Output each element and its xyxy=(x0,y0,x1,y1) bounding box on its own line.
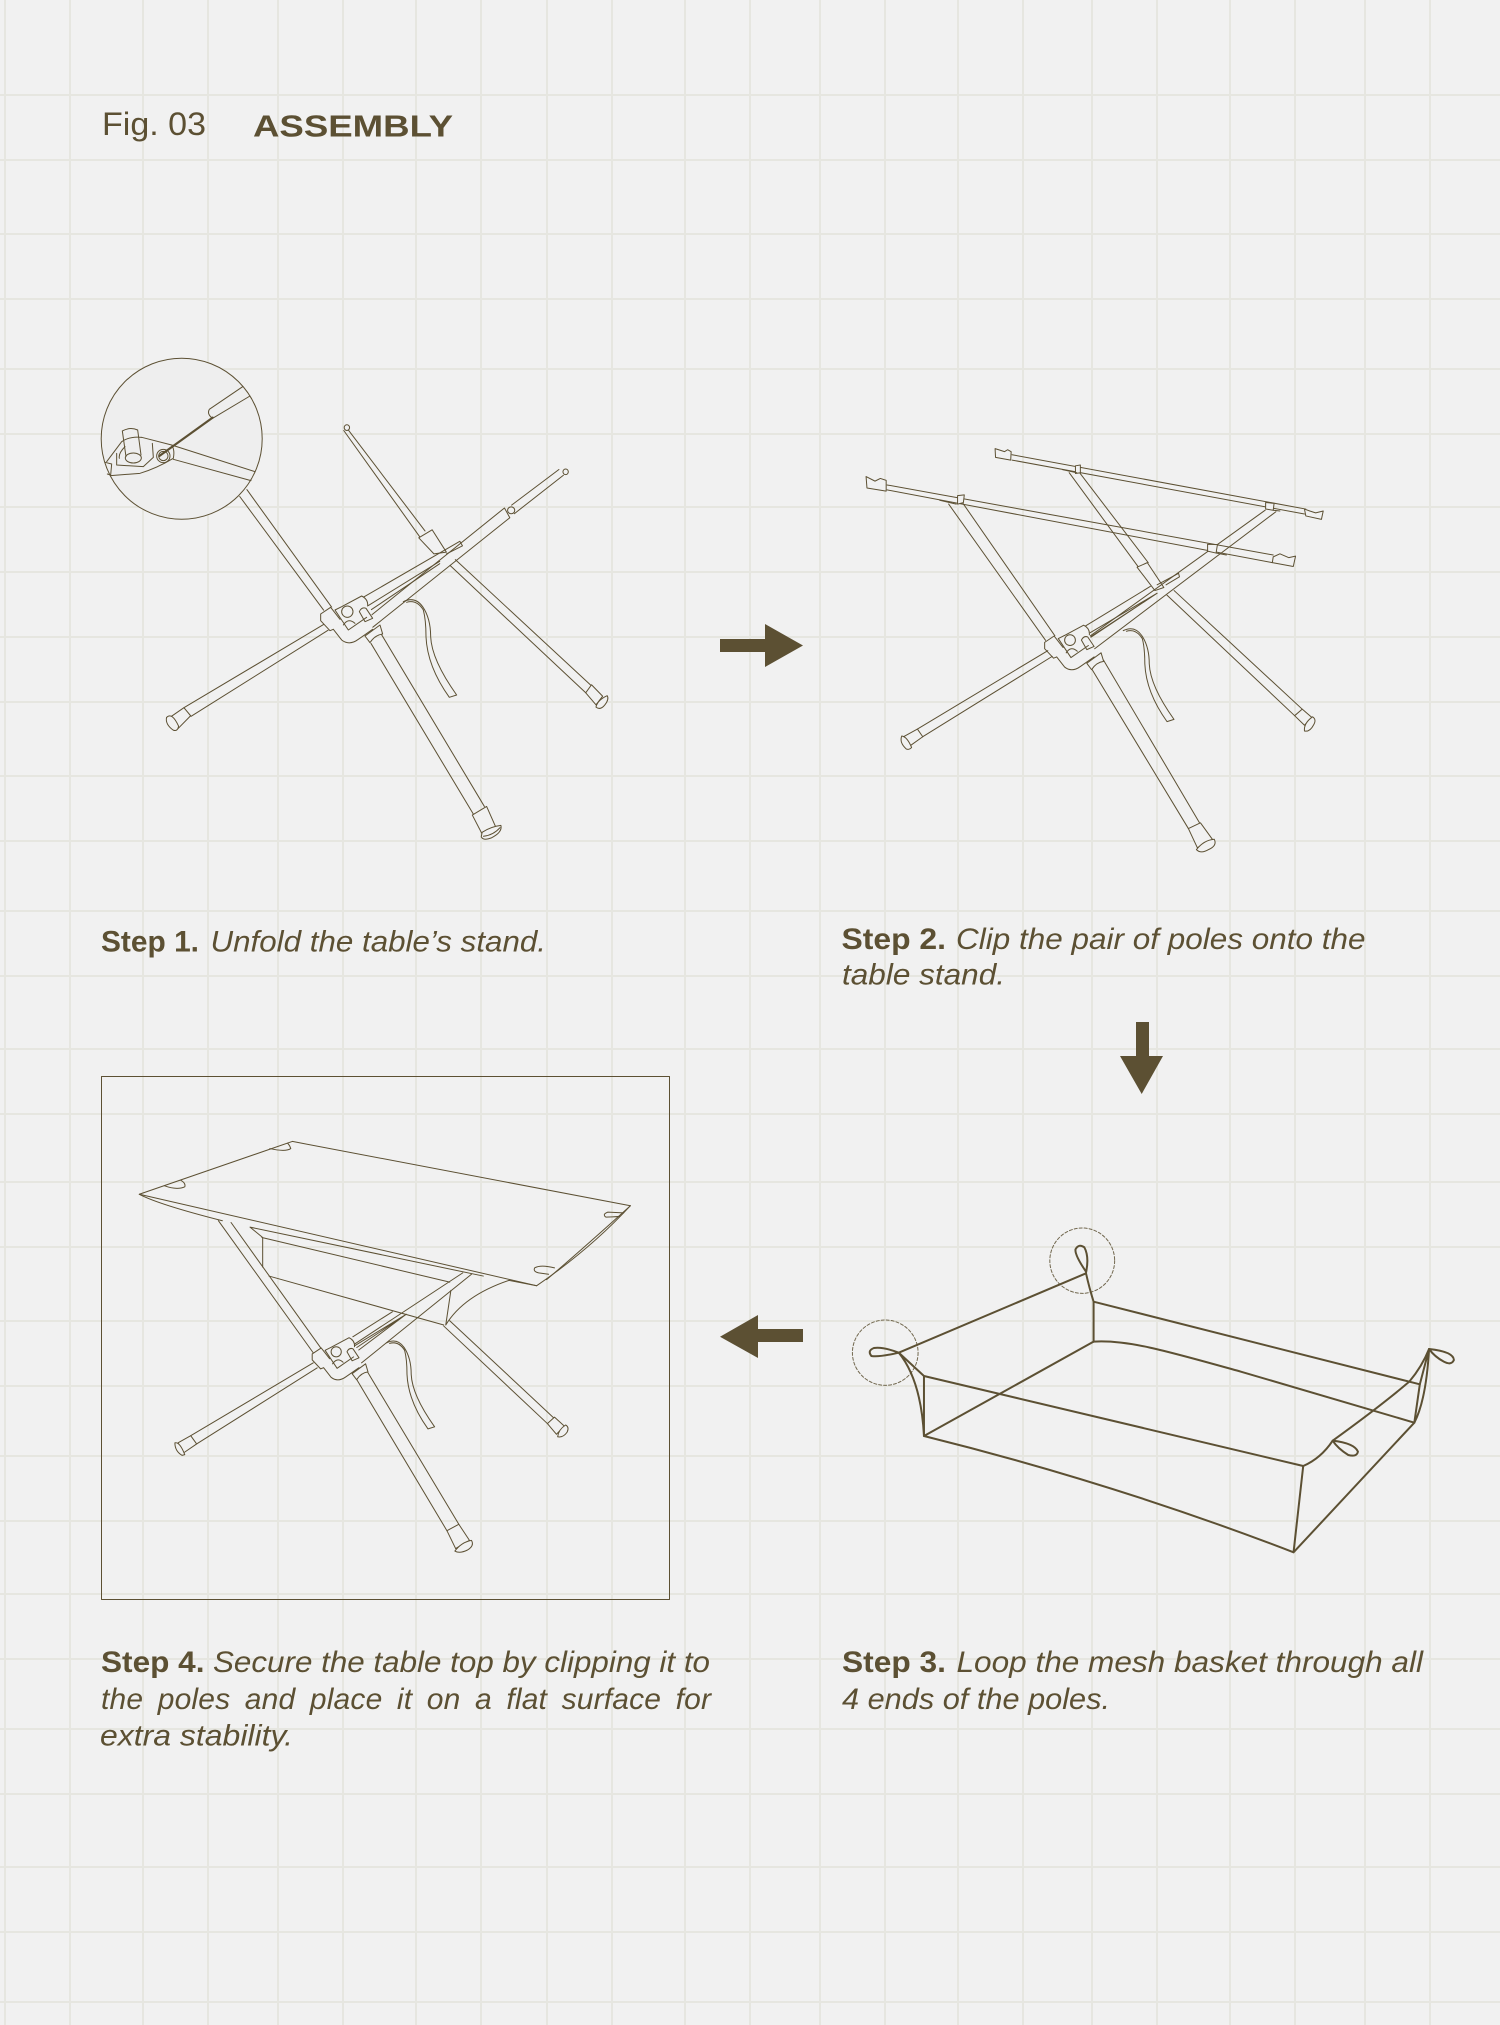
caption: step 1: Unfold the table’s stand. xyxy=(210,926,546,959)
figure number: Fig. 03 xyxy=(102,106,206,142)
heading: ASSEMBLY xyxy=(253,108,453,144)
title: Fig. 03 Assembly xyxy=(102,106,453,144)
hub bracket and strap xyxy=(321,596,457,697)
caption: step 4 xyxy=(100,1646,712,1753)
caption: step 4: Secure the table top by clipping it to xyxy=(213,1646,710,1679)
arrow: step 3 to step 4 xyxy=(720,1315,803,1358)
caption: step 2: Step 2. xyxy=(842,923,946,956)
caption: step 1: Step 1. xyxy=(101,926,199,959)
arrow: step 1 to step 2 xyxy=(720,624,803,667)
caption: step 3: Step 3. xyxy=(842,1646,946,1679)
inset joint linework xyxy=(105,387,255,481)
panel: step 1 illustration, unfolded stand xyxy=(166,425,608,839)
panel: step 3 illustration, mesh basket xyxy=(852,1228,1454,1552)
dashed highlight circles xyxy=(852,1228,1115,1385)
inset: magnified pole joint detail xyxy=(101,358,262,519)
inset circle xyxy=(101,358,262,519)
frame xyxy=(102,1076,670,1600)
caption: step 2: table stand. xyxy=(842,958,1005,992)
panel: step 4 illustration, framed complete table xyxy=(102,1076,670,1600)
stand legs and clipped poles xyxy=(866,449,1323,852)
caption: step 3: 4 ends of the poles. xyxy=(842,1683,1110,1716)
corner loops xyxy=(870,1246,1454,1456)
caption: step 4: extra stability. xyxy=(100,1720,293,1753)
caption: step 4: the poles and place it on a flat surface for xyxy=(101,1683,712,1716)
caption: step 4: Step 4. xyxy=(101,1646,204,1679)
caption: step 2 xyxy=(842,923,1366,992)
arrow: step 2 to step 3 xyxy=(1120,1022,1163,1094)
caption: step 3: Loop the mesh basket through all xyxy=(956,1646,1424,1679)
caption: step 2: Clip the pair of poles onto the xyxy=(956,923,1366,956)
hub bracket and strap xyxy=(312,1338,435,1429)
stand legs and poles xyxy=(166,425,608,839)
hub bracket and strap xyxy=(1045,625,1174,722)
caption: step 3 xyxy=(842,1646,1424,1716)
basket outline xyxy=(899,1273,1429,1552)
panel: step 2 illustration, poles clipped on xyxy=(866,449,1323,852)
table stand xyxy=(175,1221,568,1552)
table top and mesh basket edge xyxy=(139,1141,630,1325)
